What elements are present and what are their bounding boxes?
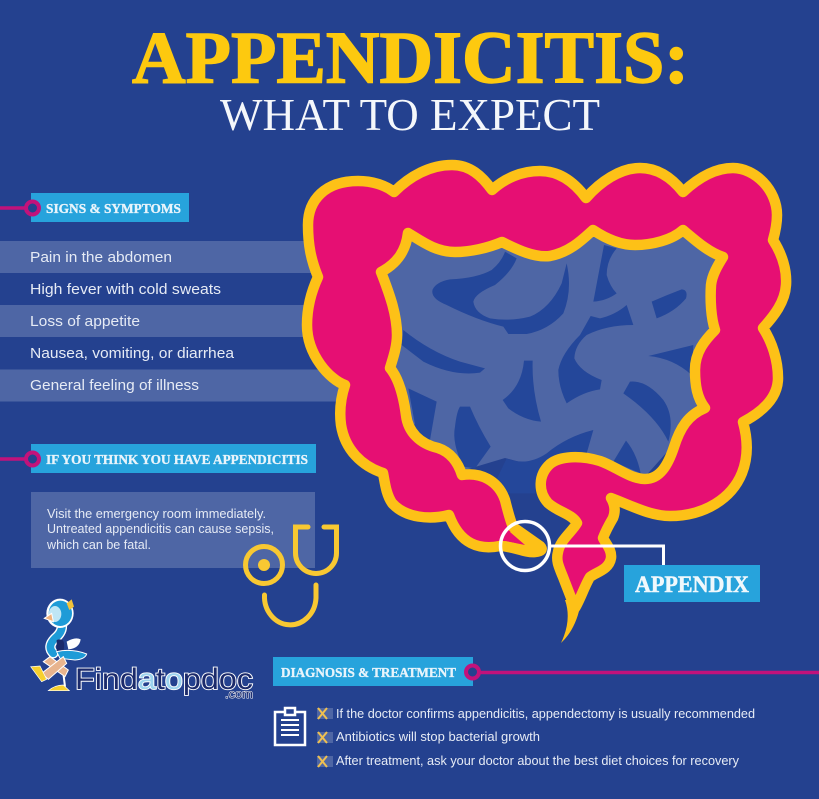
- panel: if you think you have appendicitis: [0, 444, 316, 568]
- title: [132, 18, 689, 140]
- appendix wedge: [505, 526, 545, 556]
- panel: diagnosis and treatment: After treatment, ask your doctor about the best diet choices for recovery: [336, 754, 740, 768]
- callout: appendix: APPENDIX: [635, 572, 749, 597]
- list item marks: [317, 708, 333, 767]
- panel: diagnosis and treatment: [273, 657, 819, 768]
- panel: diagnosis and treatment: If the doctor confirms appendicitis, appendectomy is usually recommended: [336, 707, 755, 721]
- panel: diagnosis and treatment: DIAGNOSIS & TREATMENT: [281, 666, 457, 681]
- panel: signs and symptoms: [0, 193, 350, 402]
- logo: Findatopdoc: [31, 599, 253, 701]
- panel: if you think you have appendicitis: which can be fatal.: [46, 538, 151, 552]
- panel: if you think you have appendicitis: IF YOU THINK YOU HAVE APPENDICITIS: [46, 453, 308, 468]
- title: APPENDICITIS:: [132, 18, 689, 100]
- appendix tail tip: [561, 600, 580, 643]
- panel: signs and symptoms: SIGNS & SYMPTOMS: [46, 202, 181, 217]
- title: WHAT TO EXPECT: [220, 89, 600, 140]
- panel: signs and symptoms: General feeling of illness: [30, 377, 199, 394]
- panel: if you think you have appendicitis: Untreated appendicitis can cause sepsis,: [47, 522, 274, 536]
- panel: signs and symptoms: Nausea, vomiting, or diarrhea: [30, 345, 235, 362]
- panel: signs and symptoms: Loss of appetite: [30, 313, 140, 330]
- logo: Findatopdoc: .com: [225, 687, 253, 701]
- callout: appendix: [500, 522, 760, 602]
- icon: stethoscope: [246, 527, 336, 625]
- intestines illustration: [381, 230, 723, 493]
- icon: duck mascot: [31, 599, 87, 691]
- panel: signs and symptoms: Pain in the abdomen: [30, 249, 172, 266]
- wordmark: Findatopdoc: [75, 663, 253, 696]
- icon: clipboard: [275, 708, 305, 745]
- panel: signs and symptoms: High fever with cold sweats: [30, 281, 221, 298]
- panel: diagnosis and treatment: Antibiotics will stop bacterial growth: [336, 730, 540, 744]
- colon illustration: [307, 165, 786, 643]
- panel: if you think you have appendicitis: Visit the emergency room immediately.: [47, 507, 266, 521]
